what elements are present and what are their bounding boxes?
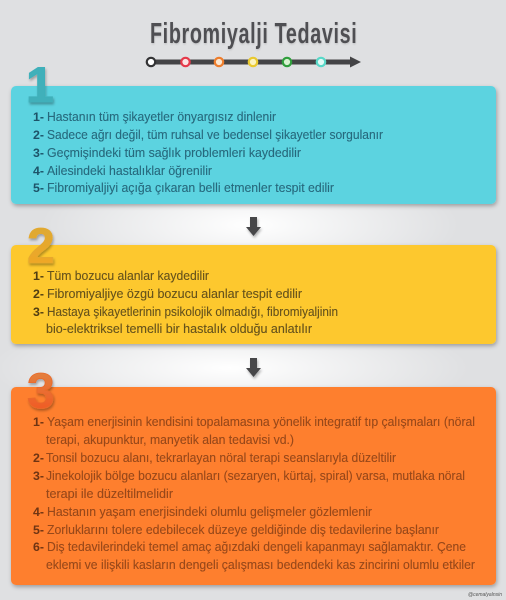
list: step 1 items: 1- (33, 110, 44, 124)
list: step 3 items: Zorluklarını tolere edebilecek düzeye geldiğinde diş tedavilerine başlanır (47, 522, 440, 537)
list: step 1 items: 4- (33, 164, 44, 178)
list: step 2 items: Fibromiyaljiye özgü bozucu alanlar tespit edilir (47, 286, 303, 301)
list: step 2 items: 2- (33, 287, 44, 301)
panel: step 3 (11, 363, 496, 585)
panel 1 background (11, 86, 496, 204)
list: step 3 items: Jinekolojik bölge bozucu alanları (sezaryen, kürtaj, spiral) varsa, mutlaka nöral (46, 468, 465, 483)
timeline arrow with coloured nodes (147, 56, 361, 68)
list: step 3 items: terapi ile düzeltilmelidir (46, 486, 174, 501)
list: step 2 items: bio-elektriksel temelli bir hastalık olduğu anlatılır (46, 321, 313, 336)
list: step 3 items: Tonsil bozucu alanı, tekrarlayan nöral terapi seanslarıyla düzeltilir (46, 450, 397, 465)
list: step 3 items: 2- (33, 451, 44, 465)
step number 2: 2 (27, 218, 55, 274)
panel 2 background (11, 245, 496, 344)
panel 3 background (11, 387, 496, 585)
list: step 2 items: Tüm bozucu alanlar kaydedilir (47, 268, 210, 283)
list: step 1 items: 3- (33, 146, 44, 160)
list: step 3 items: 1- (33, 415, 44, 429)
list: step 1 items: Hastanın tüm şikayetler önyargısız dinlenir (47, 109, 277, 124)
list: step 2 items (33, 268, 338, 336)
list: step 2 items: Hastaya şikayetlerinin psikolojik olmadığı, fibromiyaljinin (47, 304, 338, 319)
title: Fibromiyalji Tedavisi (150, 18, 357, 50)
arrow: step 2 to 3 (246, 358, 261, 377)
panel: step 2 (11, 218, 496, 344)
arrow: step 1 to 2 (246, 217, 261, 236)
list: step 3 items: terapi, akupunktur, manyetik alan tedavisi vd.) (46, 432, 294, 447)
list: step 3 items: eklemi ve ilişkili kasların dengeli çalışması bedendeki kas zincirini olumlu etkiler (46, 557, 476, 572)
panel: step 1 (11, 57, 496, 204)
signature: @cemalyalnsin (468, 592, 502, 598)
step number 3: 3 (27, 363, 55, 419)
list: step 1 items: 2- (33, 128, 44, 142)
list: step 3 items: 4- (33, 505, 44, 519)
list: step 1 items: Ailesindeki hastalıklar öğrenilir (47, 163, 213, 178)
list: step 3 items: 3- (33, 469, 44, 483)
list: step 1 items: Fibromiyaljiyi açığa çıkaran belli etmenler tespit edilir (47, 180, 335, 195)
list: step 3 items: Hastanın yaşam enerjisindeki olumlu gelişmeler gözlemlenir (47, 504, 373, 519)
list: step 3 items (33, 414, 476, 572)
list: step 3 items: 6- (33, 540, 44, 554)
list: step 1 items: 5- (33, 181, 44, 195)
list: step 2 items: 3- (33, 305, 44, 319)
list: step 3 items: 5- (33, 523, 44, 537)
list: step 3 items: Diş tedavilerindeki temel amaç ağızdaki dengeli kapanmayı sağlamaktır. Çene (47, 539, 466, 554)
list: step 1 items: Sadece ağrı değil, tüm ruhsal ve bedensel şikayetler sorgulanır (47, 127, 384, 142)
list: step 2 items: 1- (33, 269, 44, 283)
list: step 1 items: Geçmişindeki tüm sağlık problemleri kaydedilir (47, 145, 302, 160)
list: step 3 items: Yaşam enerjisinin kendisini topalamasına yönelik integratif tıp çalışmaları (nöral (47, 414, 475, 429)
list: step 1 items (33, 109, 384, 195)
step number 1: 1 (26, 57, 54, 113)
